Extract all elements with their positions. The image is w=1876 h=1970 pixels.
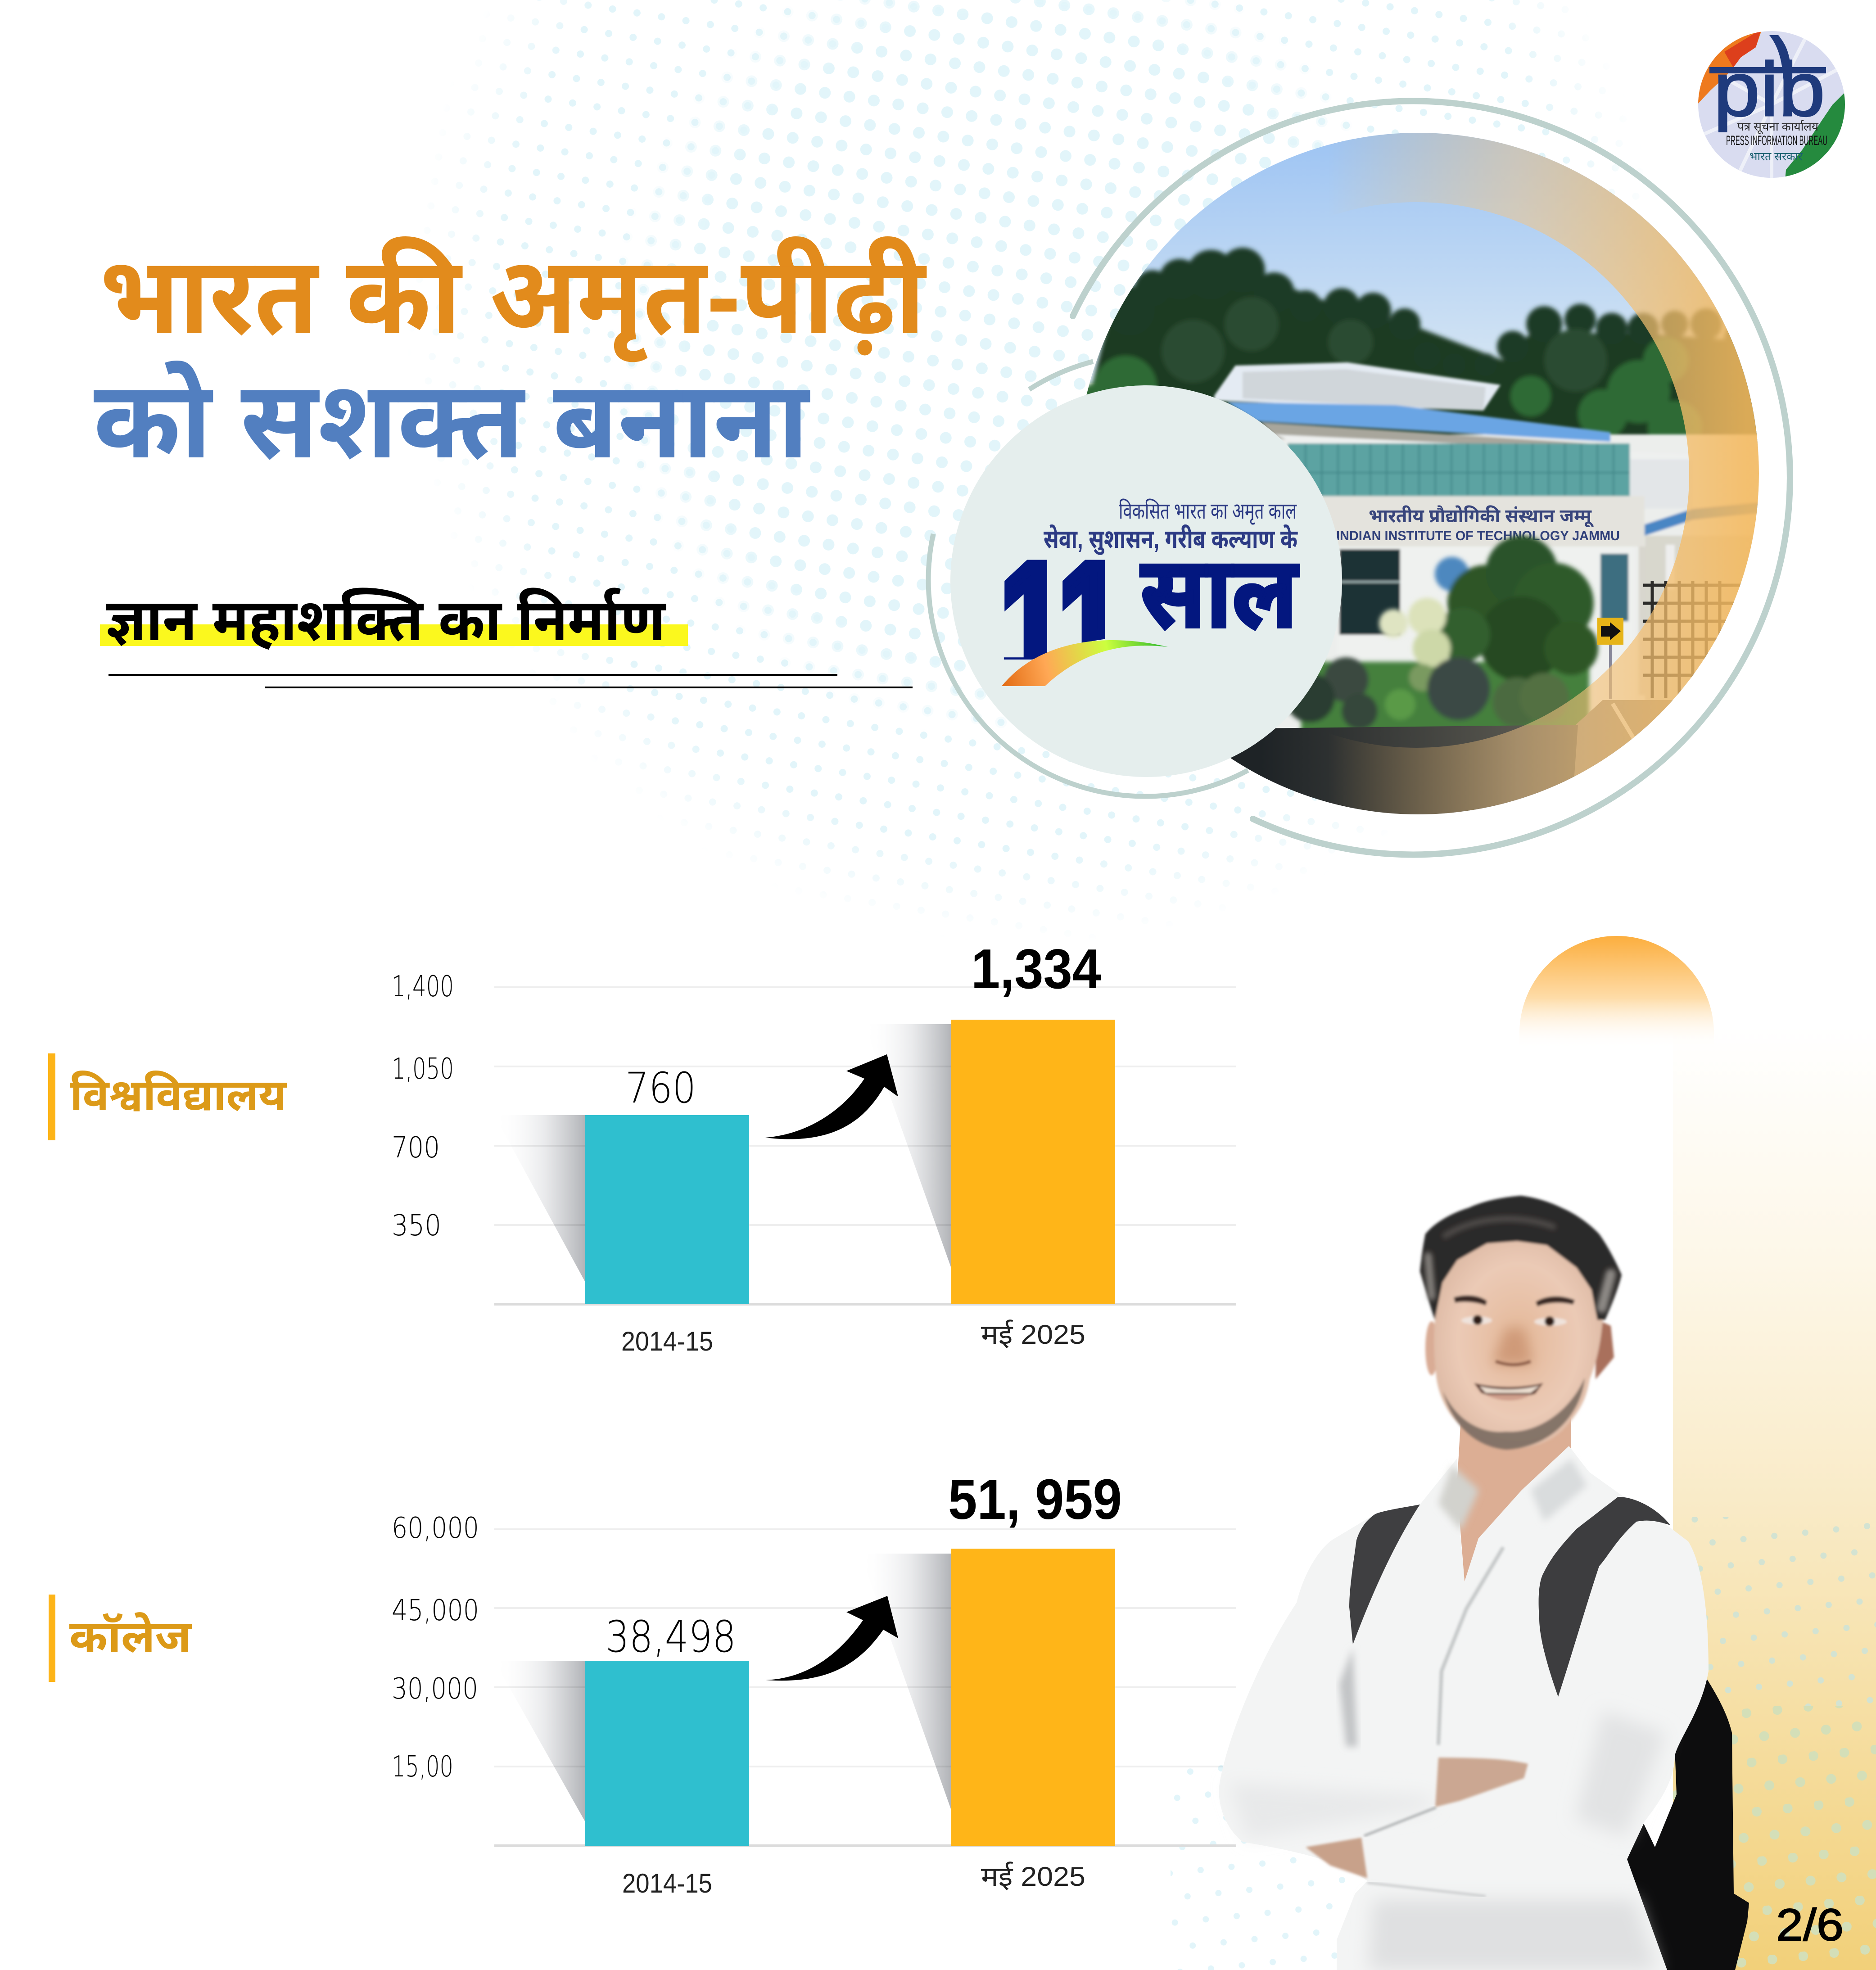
chart: universities	[392, 938, 1236, 1356]
grid lines	[494, 1529, 1236, 1767]
black wall	[1171, 725, 1578, 819]
value 38,498: 38,498	[606, 1612, 736, 1662]
road marking	[1613, 704, 1636, 742]
PIB logo	[1697, 27, 1846, 180]
left ear	[1425, 1321, 1438, 1375]
outer ring arc	[1073, 101, 1790, 854]
trees	[1076, 248, 1760, 455]
PIB logo: pib	[1713, 47, 1825, 132]
hair	[1420, 1196, 1622, 1320]
sign board text: भारतीय प्रौद्योगिकी संस्थान जम्मू	[1369, 505, 1594, 528]
nose shadow	[1492, 1328, 1533, 1364]
nostrils	[1496, 1361, 1531, 1365]
accent bar	[48, 1053, 55, 1140]
bar shadow May 2025	[860, 1554, 951, 1810]
subtitle with yellow highlight: ज्ञान महाशक्ति का निर्माण	[106, 587, 666, 653]
page number: 2/6	[1776, 1900, 1844, 1950]
sky	[1076, 131, 1760, 383]
value 51,959: 51, 959	[948, 1468, 1122, 1531]
head	[1420, 1196, 1622, 1450]
shirt	[1219, 1446, 1709, 1970]
illustration: student with backpack	[1219, 1196, 1749, 1970]
x labels: 2014-15	[621, 1326, 713, 1356]
value 760: 760	[625, 1064, 696, 1113]
bar shadow May 2025	[864, 1024, 951, 1268]
shirt shading	[1229, 1459, 1666, 1970]
building	[1212, 360, 1758, 728]
value 1,334: 1,334	[971, 938, 1101, 1000]
eyes	[1461, 1316, 1492, 1324]
PIB logo: पत्र सूचना कार्यालय	[1737, 120, 1819, 134]
y axis labels: 1,400	[392, 970, 454, 1003]
subtitle underlines	[108, 675, 913, 687]
grid lines	[494, 987, 1236, 1225]
bar shadow 2014-15	[494, 1661, 585, 1822]
neck	[1457, 1418, 1571, 1581]
backpack	[1627, 1674, 1749, 1970]
badge line 1: विकसित भारत का अमृत काल	[1119, 498, 1297, 525]
chart: colleges: मई 2025	[981, 1862, 1085, 1892]
growth arrow	[765, 1054, 898, 1139]
orange gradient crescent	[1077, 133, 1759, 814]
y axis labels: 1,050	[392, 1053, 454, 1086]
bar May 2025	[951, 1549, 1115, 1846]
inner ring arcs	[928, 361, 1248, 796]
hair side highlights	[1428, 1219, 1611, 1308]
y axis labels: 700	[392, 1131, 440, 1165]
mouth	[1474, 1383, 1543, 1397]
section: colleges	[49, 1595, 192, 1682]
gate	[1643, 581, 1742, 698]
badge circle: 11 years	[950, 385, 1342, 777]
bar 2014-15	[585, 1115, 749, 1304]
y axis labels	[392, 1512, 479, 1784]
section: universities	[48, 1053, 287, 1140]
PIB logo: भारत सरकार	[1749, 149, 1803, 163]
x labels: 2014-15	[622, 1868, 712, 1898]
accent bar	[49, 1595, 55, 1682]
y axis labels	[392, 970, 454, 1243]
garden	[1285, 536, 1598, 734]
background: cream gradient panel with dots	[1673, 1026, 1876, 1970]
growth arrow	[766, 1596, 898, 1681]
chart: universities: मई 2025	[981, 1319, 1085, 1350]
right strap	[1539, 1497, 1670, 1697]
y axis labels: 350	[392, 1209, 441, 1243]
badge line 2: सेवा, सुशासन, गरीब कल्याण के	[1044, 524, 1298, 555]
chart: colleges	[392, 1468, 1236, 1898]
section label: कॉलेज	[69, 1612, 192, 1661]
badge swoosh	[1002, 640, 1168, 686]
badge number 11: 11	[1000, 529, 1123, 715]
y axis labels: 15,00	[392, 1750, 453, 1784]
direction sign	[1597, 618, 1623, 699]
background: orange dome	[1519, 936, 1714, 1049]
sign board text: INDIAN INSTITUTE OF TECHNOLOGY JAMMU	[1336, 529, 1620, 543]
face	[1434, 1234, 1603, 1449]
bar 2014-15	[585, 1661, 749, 1846]
y axis labels: 45,000	[392, 1594, 479, 1627]
road	[1549, 700, 1760, 819]
section label: विश्वविद्यालय	[70, 1070, 287, 1120]
y axis labels: 30,000	[392, 1672, 478, 1706]
title line 2: को सशक्त बनाना	[94, 360, 810, 480]
bar May 2025	[951, 1020, 1115, 1304]
right ear	[1596, 1319, 1614, 1379]
sign board text	[1336, 505, 1620, 543]
badge word: साल	[1140, 537, 1299, 649]
left strap	[1349, 1505, 1420, 1645]
y axis labels: 60,000	[392, 1512, 479, 1545]
stubble	[1443, 1378, 1585, 1450]
photo: IIT Jammu campus	[1076, 131, 1760, 819]
hands	[1306, 1758, 1528, 1878]
eyebrows	[1454, 1295, 1487, 1306]
bar shadow 2014-15	[494, 1115, 585, 1282]
title line 1: भारत की अमृत-पीढ़ी	[99, 235, 927, 362]
